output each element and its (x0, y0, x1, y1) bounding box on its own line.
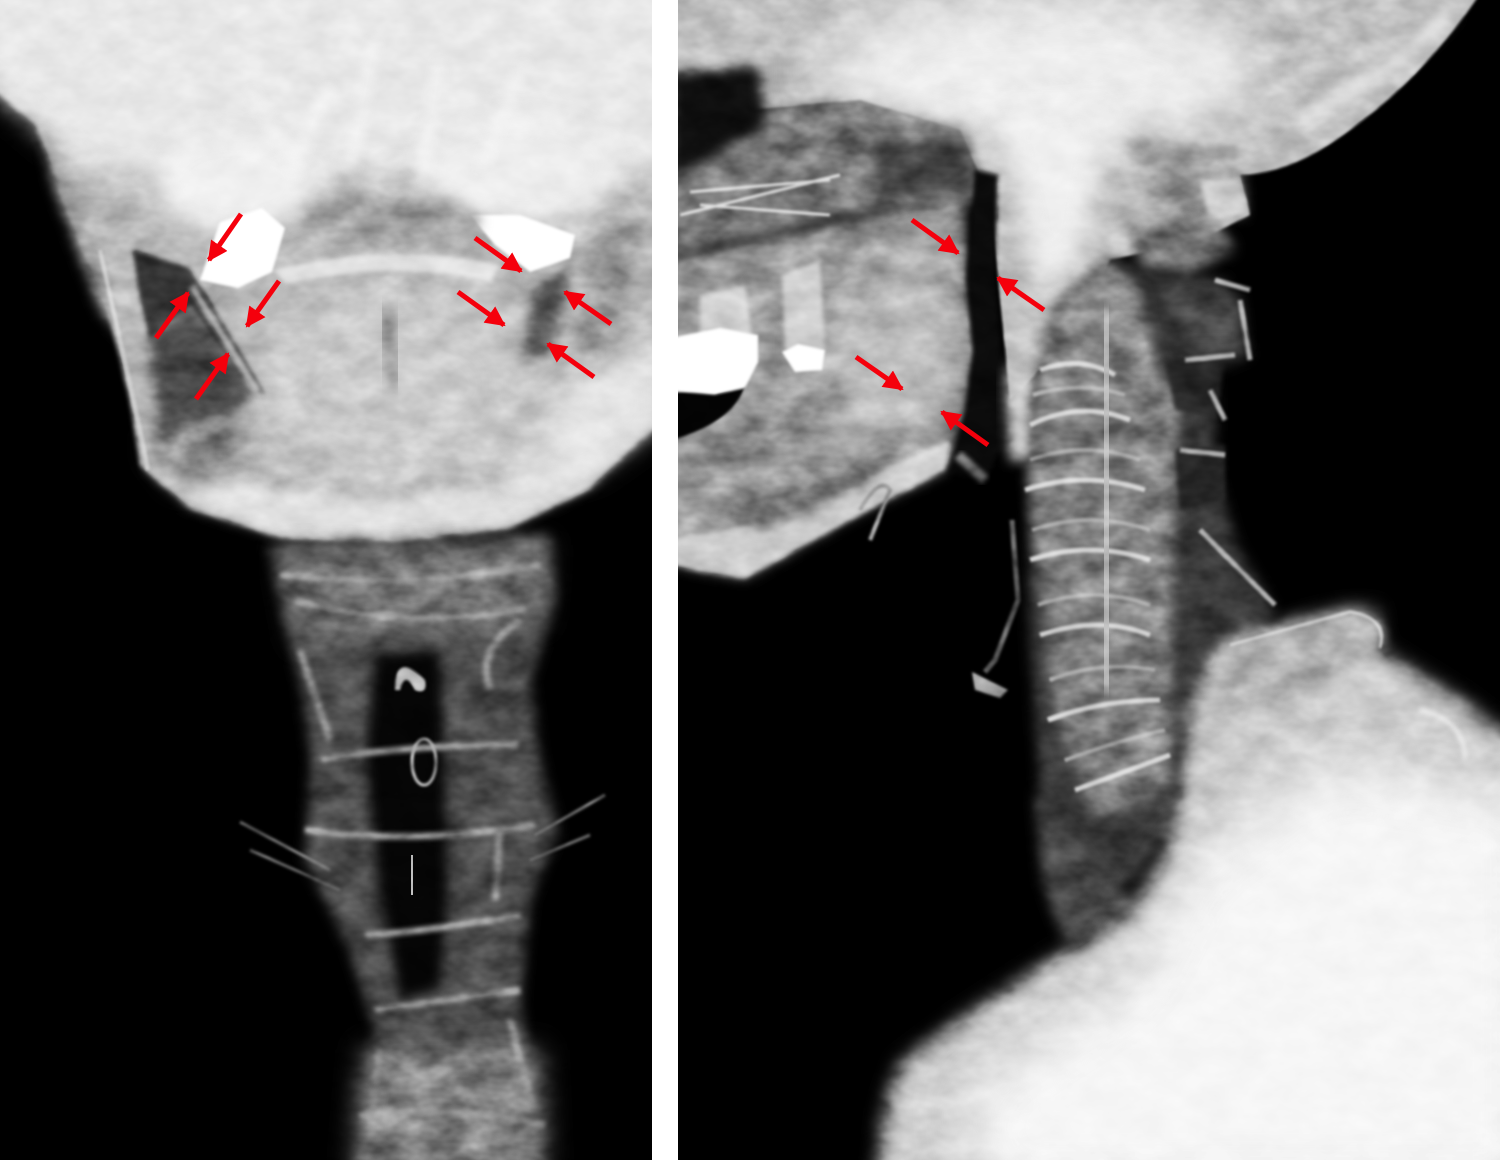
cervical spine, lateral (1005, 258, 1275, 900)
dental fillings, lateral (660, 328, 825, 395)
skull base and occiput, lateral (640, 0, 1500, 400)
texture overlay, frontal (0, 0, 652, 1160)
hyoid and laryngeal calcification, lateral (860, 455, 1018, 698)
skull and mandible, frontal (0, 0, 700, 542)
dark rami, frontal (100, 215, 640, 485)
neck soft tissue, lateral (1035, 790, 1135, 945)
shoulder and upper torso, lateral (875, 610, 1500, 1160)
arrows: lateral view (856, 220, 1044, 445)
texture overlay, lateral (678, 0, 1500, 1160)
airway, lateral (950, 170, 1005, 480)
panel: lateral view radiograph (640, 0, 1500, 1160)
teeth and palate, frontal (200, 40, 575, 385)
upper airway and sinus, lateral (650, 65, 985, 260)
panel: frontal view radiograph (0, 0, 700, 1160)
mandible, lateral (650, 200, 975, 578)
cervical spine, frontal (240, 535, 605, 1160)
arrows: frontal view (156, 214, 611, 399)
